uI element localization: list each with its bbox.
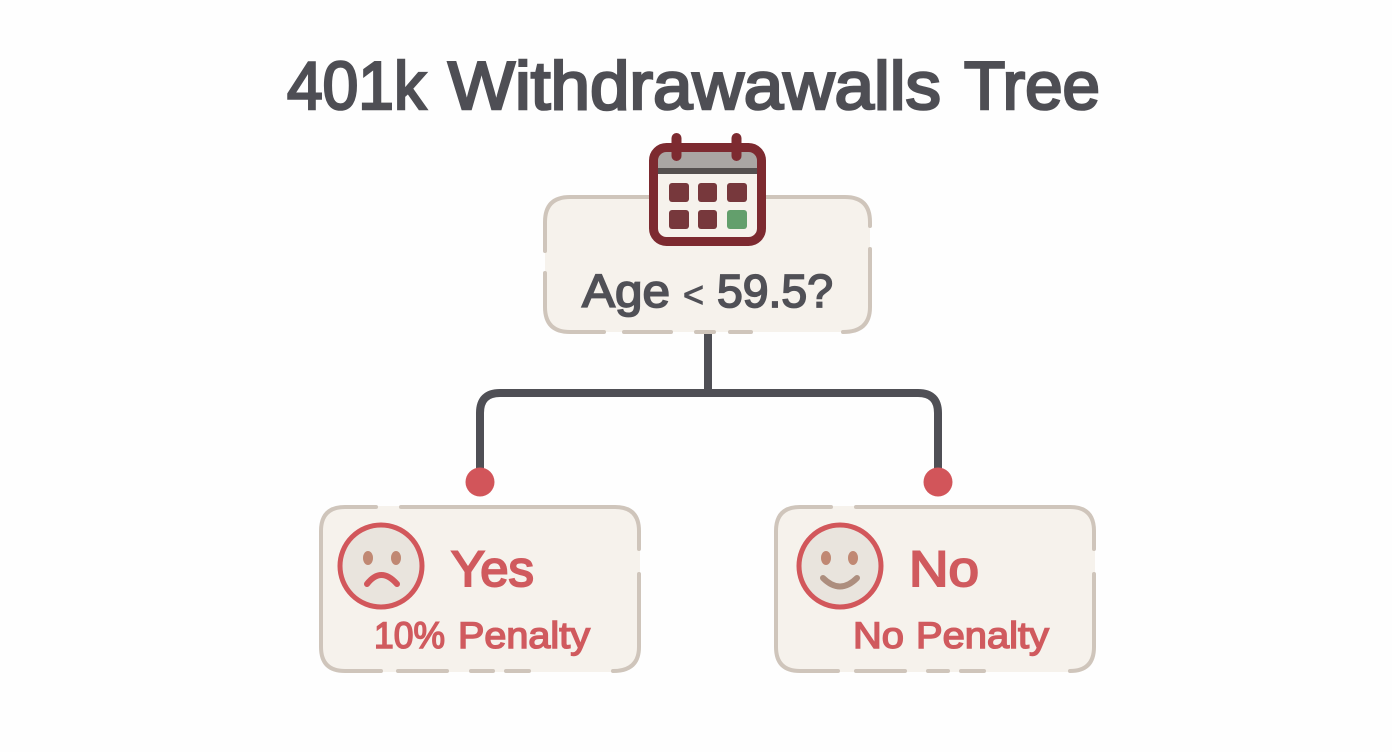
connector dot: no branch	[924, 468, 952, 496]
title: Withdrawawalls	[448, 48, 941, 124]
question text	[582, 265, 833, 317]
connector: tree branches	[480, 332, 938, 470]
label: 10% penalty: Penalty	[458, 615, 591, 656]
panel: no outcome	[775, 506, 1095, 672]
label: no penalty	[853, 615, 1050, 656]
label: 10% penalty: 10%	[374, 615, 445, 656]
panel: age question	[545, 133, 870, 332]
label: no penalty: No	[853, 615, 904, 656]
label: no penalty: Penalty	[916, 615, 1050, 656]
question text: <	[683, 274, 704, 315]
icon: happy face	[799, 525, 881, 607]
question text: 59.5?	[717, 265, 833, 317]
panel: yes outcome	[320, 506, 640, 672]
title: Tree	[964, 48, 1100, 124]
connector dot: yes branch	[466, 468, 494, 496]
question text: Age	[582, 265, 670, 317]
label: no: No	[909, 541, 979, 597]
label: 10% penalty	[374, 615, 591, 656]
label: yes: Yes	[451, 541, 534, 597]
title	[287, 48, 1100, 124]
icon: calendar	[654, 133, 762, 242]
icon: sad face	[340, 525, 422, 607]
title: 401k	[287, 48, 427, 124]
